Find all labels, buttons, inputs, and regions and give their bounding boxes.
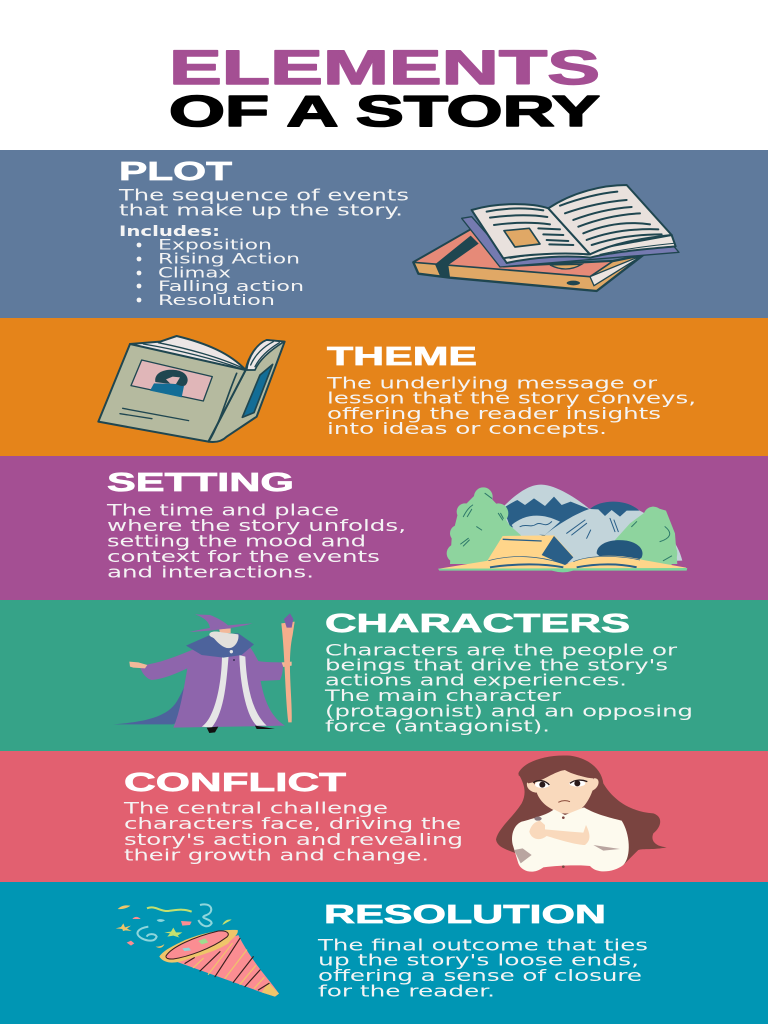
heading: conflict: CONFLICT — [124, 767, 346, 797]
theme description: lesson that the story conveys, — [327, 388, 696, 408]
conflict description: story's action and revealing — [124, 830, 463, 849]
icon: stack of books — [413, 185, 679, 291]
plot includes list: Falling action — [158, 279, 304, 295]
panel: conflict — [0, 751, 768, 882]
characters description: actions and experiences. — [325, 670, 627, 690]
icon: party popper — [116, 904, 279, 997]
theme description: offering the reader insights — [327, 404, 661, 423]
resolution description: for the reader. — [318, 982, 495, 1000]
icon: worried girl — [496, 755, 667, 872]
heading: setting: SETTING — [107, 467, 294, 497]
panel: setting — [0, 456, 768, 600]
theme description: into ideas or concepts. — [327, 419, 607, 438]
resolution description — [316, 936, 648, 1000]
characters description: (protagonist) and an opposing — [325, 702, 693, 720]
heading: characters: CHARACTERS — [325, 608, 630, 638]
title — [169, 42, 600, 136]
plot includes list — [119, 224, 304, 309]
heading: plot: PLOT — [119, 156, 232, 186]
setting description: where the story unfolds, — [107, 516, 406, 535]
theme description: The underlying message or — [325, 374, 658, 392]
icon: storybook landscape — [438, 485, 687, 572]
theme description — [325, 374, 696, 438]
icon: wizard — [113, 613, 295, 733]
panel: plot — [0, 150, 768, 318]
icon: paperback book — [98, 336, 285, 442]
characters description: Characters are the people or — [325, 640, 678, 660]
plot includes list: Rising Action — [158, 252, 300, 268]
panel: theme — [0, 318, 768, 456]
setting description: The time and place — [105, 500, 339, 520]
characters description: beings that drive the story's — [325, 656, 668, 674]
setting description: context for the events — [107, 547, 380, 566]
setting description: and interactions. — [107, 562, 314, 582]
resolution description: The final outcome that ties — [316, 936, 648, 954]
title: ELEMENTS — [169, 42, 600, 95]
resolution description: offering a sense of closure — [318, 966, 642, 985]
plot description — [117, 186, 409, 220]
plot description: that make up the story. — [119, 200, 403, 220]
conflict description: The central challenge — [122, 798, 388, 818]
plot includes list: Includes: — [119, 224, 220, 240]
plot includes list: Resolution — [158, 293, 275, 309]
conflict description: their growth and change. — [124, 846, 429, 864]
title: OF A STORY — [169, 87, 600, 136]
conflict description — [122, 798, 463, 864]
resolution description: up the story's loose ends, — [318, 950, 639, 970]
setting description: setting the mood and — [107, 532, 366, 550]
characters description — [323, 640, 693, 736]
plot description: The sequence of events — [117, 186, 409, 204]
panel: characters — [0, 600, 768, 751]
plot includes list: Climax — [158, 266, 232, 282]
setting description — [105, 500, 406, 582]
heading: theme: THEME — [327, 341, 477, 371]
conflict description: characters face, driving the — [124, 814, 461, 833]
panel: resolution — [0, 882, 768, 1024]
characters description: The main character — [323, 686, 562, 705]
heading: resolution: RESOLUTION — [324, 899, 606, 929]
plot includes list: Exposition — [158, 238, 272, 254]
characters description: force (antagonist). — [325, 716, 550, 736]
